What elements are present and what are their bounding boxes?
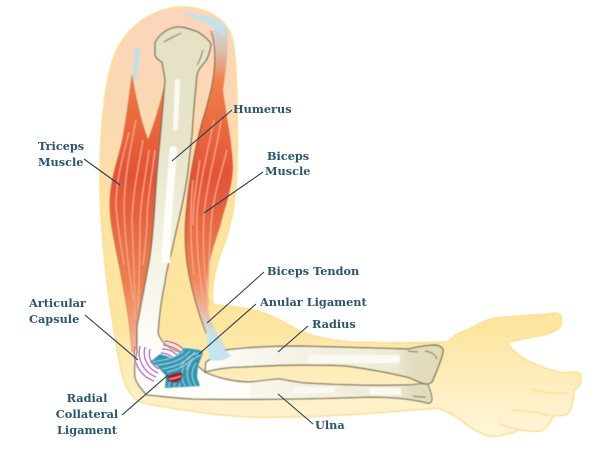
triceps muscle — [110, 48, 164, 352]
label: Radial Collateral Ligament — [56, 375, 168, 437]
articular capsule — [134, 341, 186, 381]
ulna highlights — [293, 387, 401, 395]
radius bone — [205, 345, 443, 384]
label: Triceps Muscle: Triceps — [38, 139, 84, 153]
label: Articular Capsule: Capsule — [29, 312, 79, 326]
label: Articular Capsule — [28, 296, 138, 360]
ulna shaft tint — [250, 380, 431, 403]
biceps fibres — [191, 120, 227, 310]
shoulder tendon cap — [180, 13, 225, 36]
label: Triceps Muscle: Muscle — [38, 155, 83, 169]
label: Triceps Muscle — [38, 139, 120, 185]
label: Ulna — [278, 394, 345, 432]
biceps tendon attachment — [207, 332, 231, 361]
humerus highlights — [173, 79, 180, 130]
biceps muscle and tendon — [185, 27, 233, 361]
label: Biceps Tendon — [207, 264, 359, 323]
radius highlight — [308, 355, 400, 363]
label: Radius — [278, 317, 356, 352]
radial collateral ligament tear — [167, 373, 182, 382]
label: Humerus: Humerus — [233, 102, 292, 116]
humerus and ulna bone — [135, 27, 432, 403]
label: Radial Collateral Ligament: Collateral — [56, 407, 119, 421]
finger creases — [499, 389, 567, 429]
label: Radial Collateral Ligament: Radial — [67, 391, 108, 405]
label: Radius: Radius — [312, 317, 356, 331]
arm silhouette — [100, 7, 581, 436]
humerus head shading — [164, 33, 203, 65]
label: Biceps Tendon: Biceps Tendon — [267, 264, 359, 278]
annular ligament — [150, 348, 203, 388]
label: Anular Ligament — [199, 295, 367, 354]
label: Biceps Muscle — [204, 149, 310, 213]
label: Anular Ligament: Anular Ligament — [259, 295, 367, 309]
label: Ulna: Ulna — [315, 418, 345, 432]
label: Humerus — [172, 102, 292, 161]
label: Radial Collateral Ligament: Ligament — [57, 423, 118, 437]
label: Biceps Muscle: Biceps — [267, 149, 309, 163]
triceps fibres — [116, 120, 155, 320]
label: Biceps Muscle: Muscle — [265, 164, 310, 178]
triceps tendon — [132, 48, 140, 85]
label: Articular Capsule: Articular — [28, 296, 87, 310]
